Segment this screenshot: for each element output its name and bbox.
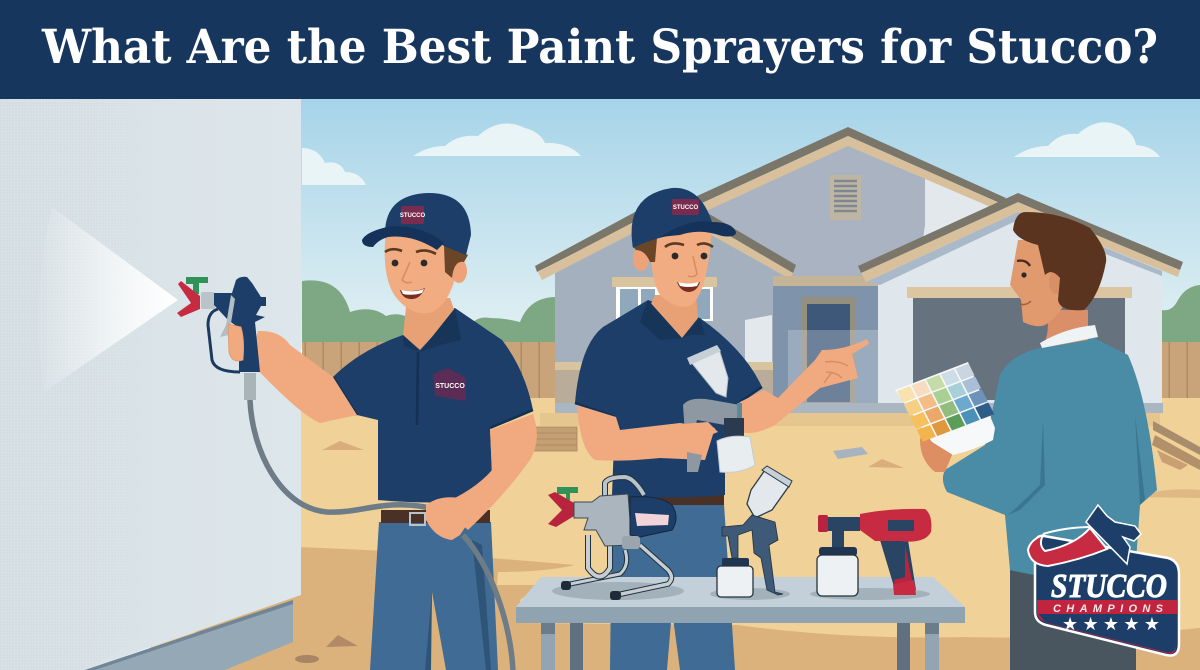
arm holding hose [440,414,537,530]
hose [250,400,430,512]
main gable [700,137,1000,300]
spray cone [39,207,178,392]
clouds [302,122,1160,185]
gripping fingers [228,324,244,361]
neck [1042,310,1088,348]
silver pump body [574,494,632,546]
trigger [220,295,235,337]
gun guard [208,309,240,372]
head [385,230,460,313]
red tip [548,492,574,527]
red band [1037,600,1177,614]
barrel [822,517,860,531]
polo shirt [333,308,533,502]
left wing wall [555,205,780,405]
belt [612,494,724,505]
main roof [697,127,1006,204]
trees [302,280,1200,342]
silver collar [201,292,215,309]
shirt logo [433,368,466,401]
Stucco Champions logo [1028,505,1179,656]
handle [880,540,916,590]
sky background [0,99,1200,349]
motor [630,497,676,537]
hand on hose [426,497,470,540]
cap logo: STUCCO [673,205,698,211]
foundation [555,403,1163,413]
airless paint sprayer [548,477,676,600]
gravity feed spray gun [717,466,792,597]
stucco wall [0,99,301,670]
house [535,127,1183,413]
green tip handle [186,277,208,294]
bottle neck [832,530,844,550]
fence [302,342,1200,398]
window [612,277,717,321]
wainscot [555,362,777,370]
ground [150,396,1200,670]
collar [403,308,461,352]
attic vent [830,175,861,220]
customer [895,212,1157,670]
green tip [557,487,578,502]
gun body [214,277,266,372]
entrance [773,276,878,404]
holding arm [577,405,715,461]
cap [632,188,736,248]
hair [444,245,468,278]
logo wordmark: STUCCO [1051,568,1167,605]
cap [362,193,471,255]
cap logo: STUCCO [400,213,425,219]
carry handle [605,477,644,496]
neck [403,298,455,350]
gun body [722,515,783,595]
ferrule [244,373,256,400]
middle painter [575,188,869,670]
title bar [0,0,1200,99]
sweater [943,336,1157,579]
ear [1049,270,1063,294]
gun cup [747,470,789,518]
polo shirt [575,300,762,498]
table [516,577,965,670]
red HVLP sprayer [817,509,931,596]
arm with spray gun [250,331,357,423]
belt [381,510,490,525]
hair [632,238,657,262]
ear [633,247,649,271]
pointing arm [735,339,869,433]
swatch card [895,362,995,455]
trowel [1086,505,1141,564]
garage door [907,287,1132,298]
red body [860,509,931,542]
left wing roof [535,192,796,273]
bottle [817,555,858,596]
bottle cap [722,558,749,567]
left painter [250,193,537,670]
face [1010,240,1070,326]
frame tubes [612,545,672,596]
customer hair [1013,212,1106,310]
red nozzle [177,281,200,317]
jeans [610,504,735,670]
held gravity spray gun [668,345,755,472]
ear [451,259,467,283]
logo tagline: CHAMPIONS [1053,603,1164,615]
swoosh [1028,528,1107,566]
hand [920,424,952,472]
badge [1035,536,1179,656]
face features [385,249,436,299]
jeans [370,522,498,670]
face features [665,243,713,292]
shirt collar [1040,325,1098,348]
stars: ★★★★★ [1062,614,1160,635]
dark pants [1010,570,1136,670]
stone and debris [295,421,1200,663]
face features [1017,261,1031,305]
shirt logo: STUCCO [435,383,465,390]
head [651,225,712,307]
collar [640,300,705,340]
bottle [717,566,753,597]
airless spray gun [177,277,266,400]
hose lower [463,535,513,670]
neck [650,295,698,338]
pivot [622,536,640,549]
wall base [85,600,293,670]
pink label [635,513,669,526]
garage wing [878,205,1162,405]
